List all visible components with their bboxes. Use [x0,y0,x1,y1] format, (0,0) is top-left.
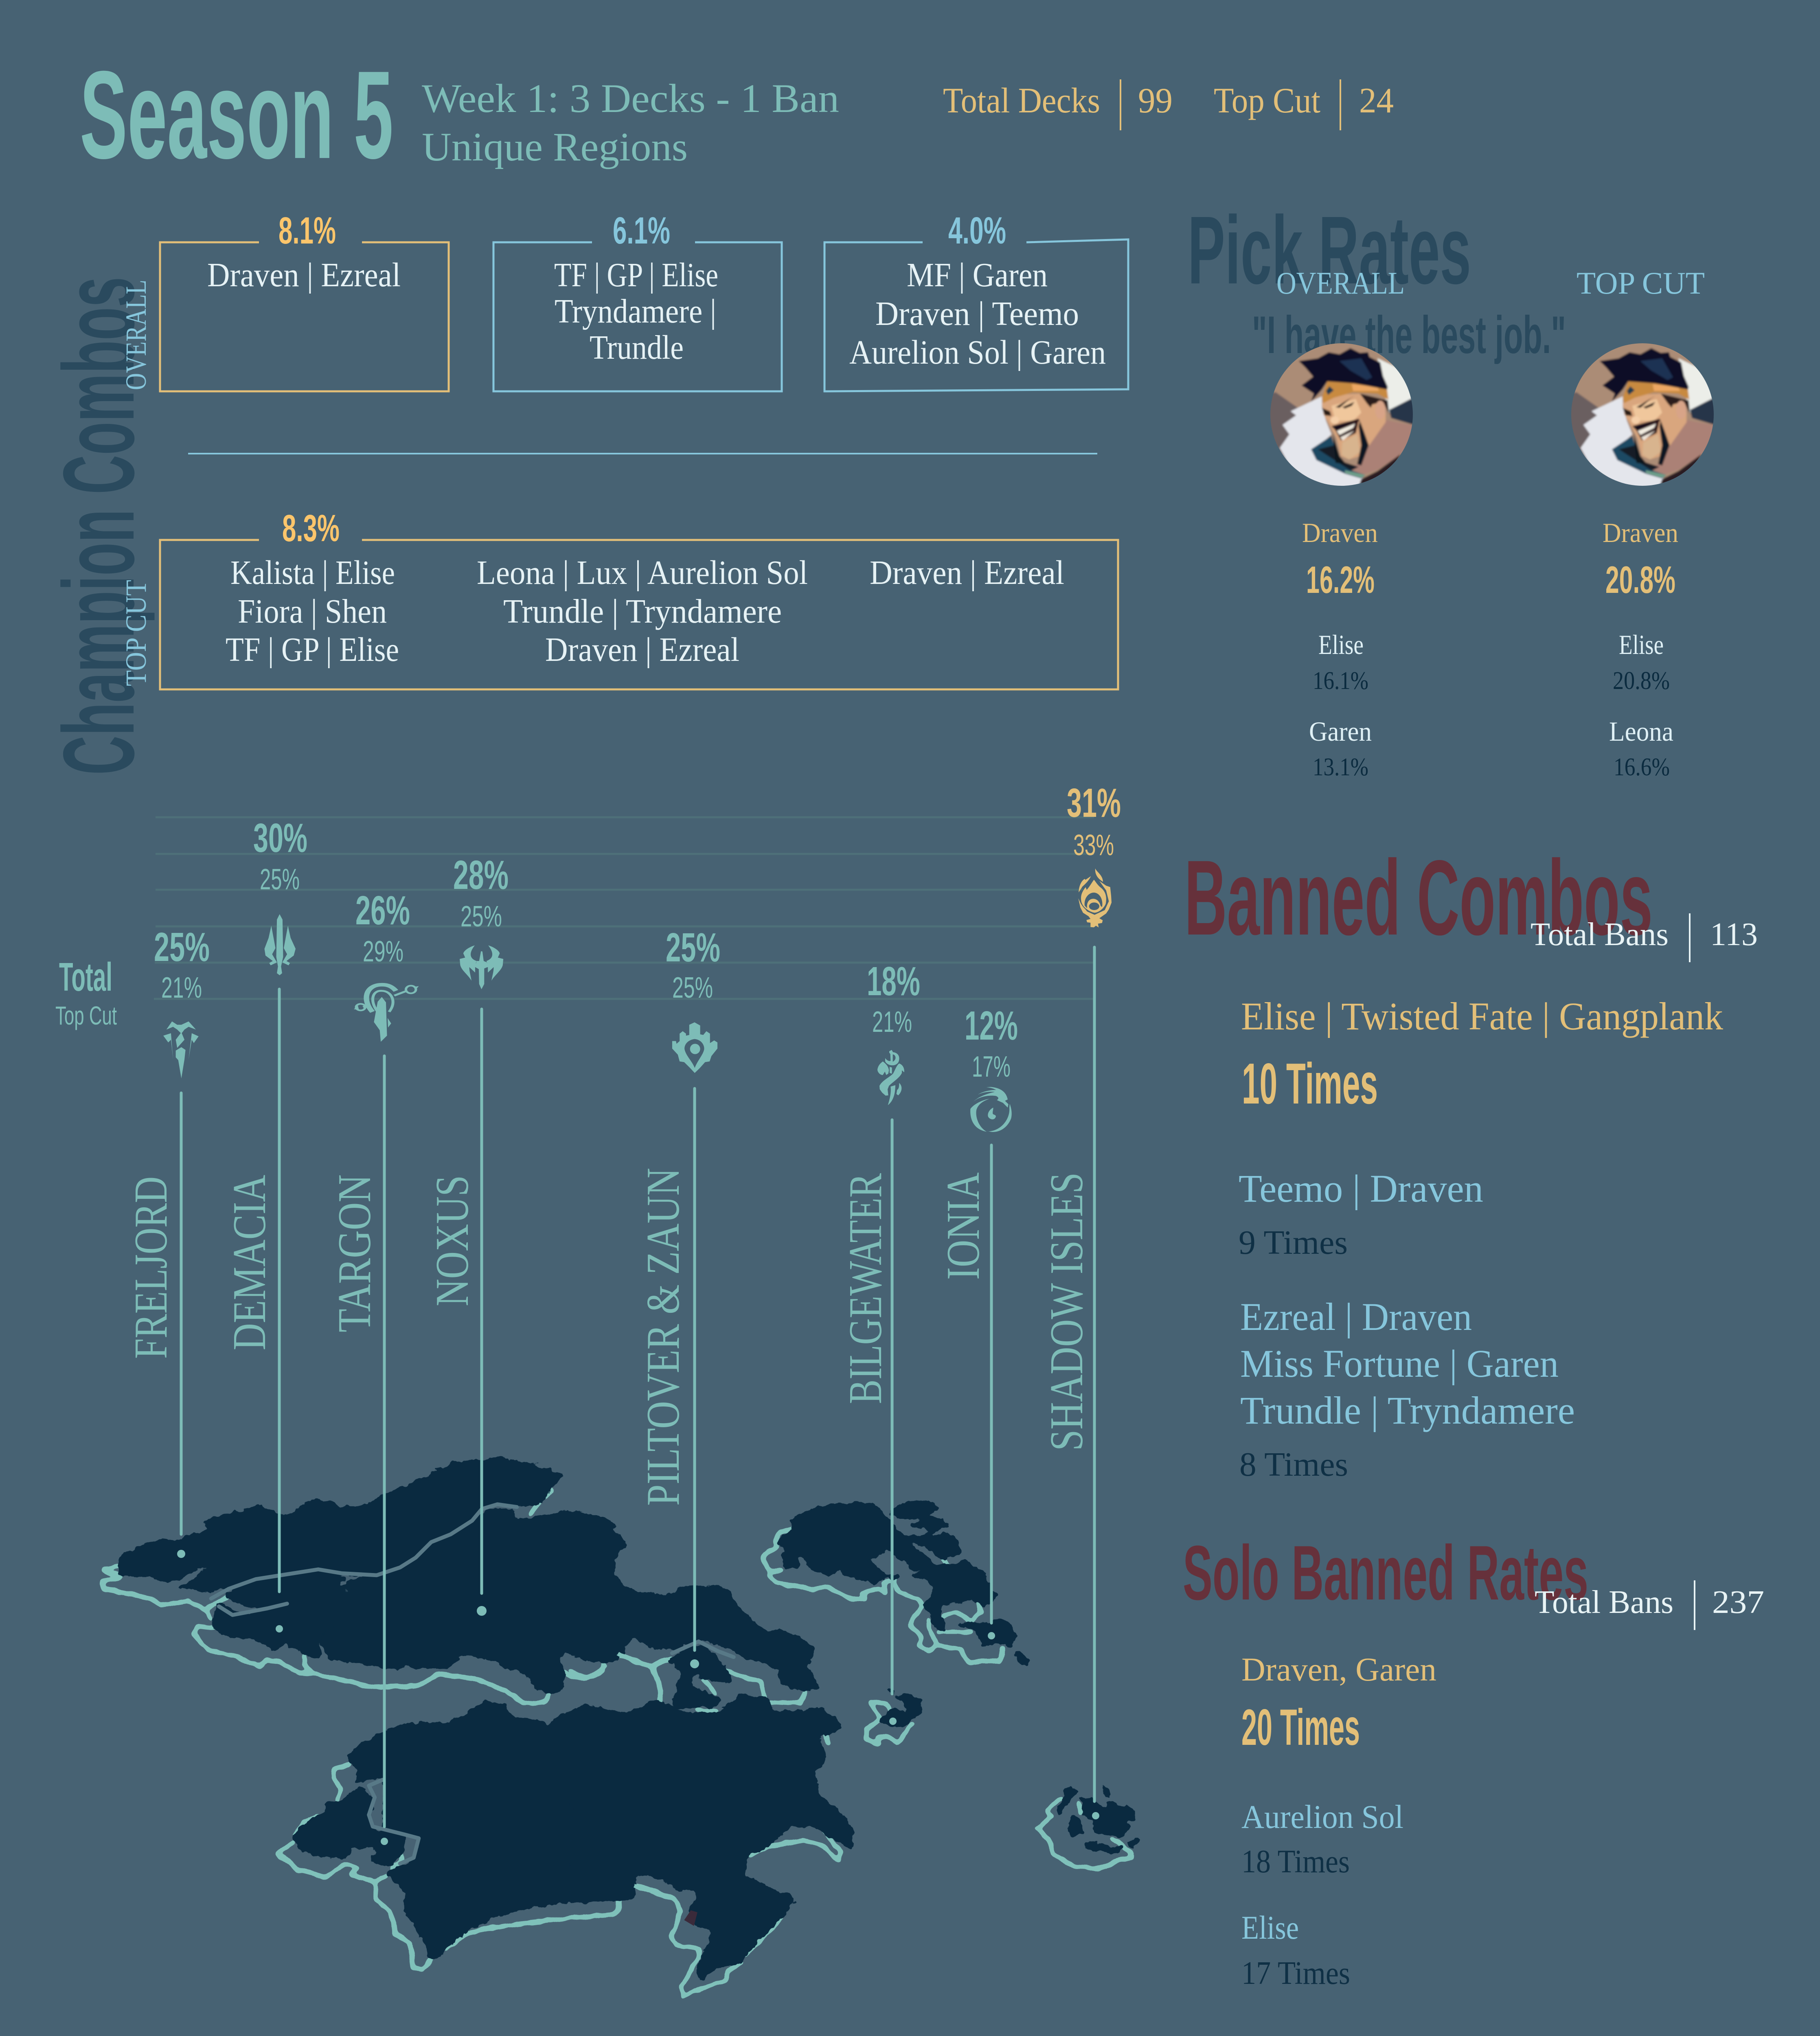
region: Ionia: IONIA [937,1172,989,1280]
panel: banned combos: Miss Fortune | Garen [1240,1342,1559,1385]
combo box: top cut 8.3%: Kalista | Elise [230,554,395,592]
column: top cut picks [1563,265,1722,781]
combo box: 4.0%: 4.0% [948,209,1006,252]
column: overall picks: Garen [1309,716,1372,747]
region: Bilgewater: BILGEWATER [840,1173,891,1404]
header stats: total decks and top cut: 24 [1359,81,1394,121]
panel: solo banned rates [1183,1530,1764,1991]
region: Freljord: 21% [161,972,202,1004]
panel: champion combos [42,209,1128,775]
side label: top cut: TOP CUT [120,580,152,686]
icon: Freljord [163,1021,199,1078]
combo box: 6.1%: Tryndamere | [555,292,716,330]
column: overall picks: 16.2% [1306,558,1375,601]
icon: Bilgewater [877,1050,904,1105]
subtitle: week format: Week 1: 3 Decks - 1 Ban [422,76,839,121]
region: Ionia [937,1003,1018,1639]
region: Freljord: FRELJORD [125,1176,177,1359]
region: Shadow Isles: SHADOW ISLES [1041,1172,1092,1451]
region: Piltover and Zaun: PILTOVER & ZAUN [637,1168,689,1506]
subtitle: week format: Unique Regions [422,124,688,169]
heading: Pick Rates: Pick Rates [1188,196,1471,304]
region: Freljord: 25% [154,924,210,970]
region: Demacia [224,815,307,1632]
column: overall picks: OVERALL [1276,265,1405,301]
axis label: total and top cut [55,954,117,1030]
region: Targon: TARGON [329,1174,380,1332]
header stats: total decks and top cut: Top Cut [1214,81,1320,121]
region: Shadow Isles: 33% [1073,829,1114,862]
panel: solo banned rates: 18 Times [1241,1844,1350,1880]
region: Bilgewater [840,959,920,1725]
total bans stat [1531,913,1758,962]
region: Piltover and Zaun: 25% [672,972,713,1004]
total bans stat: 113 [1710,917,1758,952]
total bans stat [1535,1580,1764,1630]
icon: Shadow Isles [1078,869,1112,928]
panel: solo banned rates: Elise [1241,1909,1299,1946]
column: top cut picks: 16.6% [1614,753,1670,781]
map: Runeterra [102,1458,1138,1996]
combo box: 4.0%: MF | Garen [907,256,1048,294]
column: top cut picks: Draven [1603,517,1678,548]
icon: Ionia [970,1087,1012,1132]
region: Targon: 26% [355,888,410,933]
column: overall picks [1262,265,1421,781]
title: Season 5: Season 5 [80,45,393,185]
region: Targon: 29% [363,935,403,968]
column: top cut picks: TOP CUT [1577,265,1705,301]
column: top cut picks: Elise [1619,629,1664,660]
region: Demacia: 30% [253,815,307,861]
region: Noxus [426,852,509,1616]
region: Ionia: 12% [965,1003,1018,1049]
total bans stat: Total Bans [1535,1584,1673,1620]
combo box: 4.0% [824,209,1128,391]
combo box: 6.1%: Trundle [590,329,684,366]
combo box: top cut 8.3%: Fiora | Shen [238,592,387,630]
side label: overall: OVERALL [120,280,152,390]
icon: Noxus [460,946,503,989]
combo box: 8.1% [160,209,449,391]
combo box: 6.1% [493,209,782,391]
total bans stat: 237 [1712,1584,1764,1620]
region: Shadow Isles [1041,780,1121,1819]
header stats: total decks and top cut: 99 [1138,81,1173,121]
combo box: 8.1%: Draven | Ezreal [207,256,401,294]
region: Piltover and Zaun: 25% [666,925,720,970]
portrait: Draven overall [1262,337,1421,496]
region: Noxus: NOXUS [426,1175,478,1306]
column: top cut picks: 20.8% [1613,667,1670,695]
panel: banned combos: Elise | Twisted Fate | Gangplank [1241,994,1723,1038]
combo box: top cut 8.3%: Trundle | Tryndamere [503,592,782,630]
column: overall picks: Elise [1318,629,1364,660]
panel: banned combos: Ezreal | Draven [1240,1295,1472,1338]
region: Bilgewater: 18% [867,959,920,1004]
combo box: 4.0%: Aurelion Sol | Garen [849,333,1106,371]
quote: "I have the best job." [1252,305,1566,364]
panel: banned combos: 9 Times [1239,1224,1348,1262]
region: Freljord [125,924,210,1558]
combo box: top cut 8.3% [160,507,1118,689]
panel: solo banned rates: 17 Times [1241,1955,1350,1991]
region: Targon [329,888,419,1845]
portrait: Draven top cut [1563,337,1722,496]
combo box: top cut 8.3%: TF | GP | Elise [226,631,399,669]
panel: solo banned rates: Aurelion Sol [1241,1798,1403,1835]
axis label: total and top cut: Top Cut [55,1001,117,1030]
panel: banned combos: 8 Times [1239,1446,1348,1483]
column: overall picks: Draven [1302,517,1378,548]
icon: Demacia [264,914,296,975]
column: overall picks: 16.1% [1313,667,1368,695]
panel: pick rates [1188,196,1722,781]
combo box: top cut 8.3%: Draven | Ezreal [870,554,1064,592]
total bans stat: Total Bans [1531,917,1669,952]
region: Ionia: 17% [972,1051,1011,1083]
header stats: total decks and top cut [943,79,1394,130]
region: Demacia: 25% [260,863,300,896]
panel: banned combos: Teemo | Draven [1239,1167,1483,1210]
region: Bilgewater: 21% [872,1006,912,1038]
region: Shadow Isles: 31% [1067,780,1121,826]
combo box: 4.0%: Draven | Teemo [875,295,1079,333]
panel: solo banned rates: 20 Times [1241,1699,1360,1756]
region: Piltover and Zaun [637,925,720,1668]
header stats: total decks and top cut: Total Decks [943,81,1100,121]
combo box: top cut 8.3%: 8.3% [282,507,340,549]
icon: Piltover and Zaun [672,1022,717,1073]
column: top cut picks: 20.8% [1605,558,1675,601]
combo box: 8.1%: 8.1% [278,209,336,252]
region: Noxus: 25% [460,900,502,933]
panel: banned combos [1184,838,1758,1483]
combo box: 6.1%: 6.1% [613,209,670,252]
region: Noxus: 28% [453,852,509,898]
panel: banned combos: 10 Times [1242,1051,1378,1116]
axis label: total and top cut: Total [59,954,112,999]
combo box: 6.1%: TF | GP | Elise [554,256,718,294]
combo box: top cut 8.3%: Leona | Lux | Aurelion Sol [477,554,808,592]
icon: Targon [354,985,419,1042]
region: Demacia: DEMACIA [224,1175,275,1350]
combo box: top cut 8.3%: Draven | Ezreal [545,631,739,669]
subtitle: week format [422,76,839,169]
column: top cut picks: Leona [1609,716,1673,747]
column: overall picks: 13.1% [1313,753,1368,781]
panel: banned combos: Trundle | Tryndamere [1240,1389,1575,1432]
panel: solo banned rates: Draven, Garen [1241,1651,1436,1688]
